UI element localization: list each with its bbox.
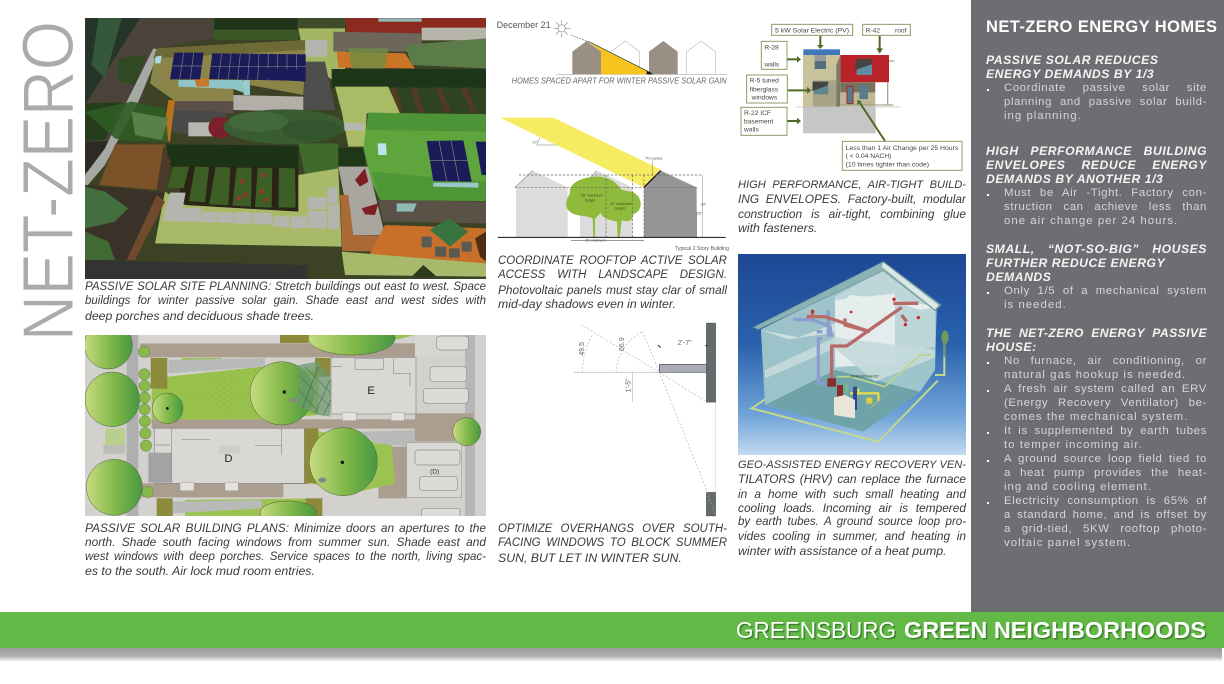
text block: passive solar — [986, 53, 1207, 122]
caption: optimize overhangs: SUN, BUT LET IN WINTER SUN. — [498, 551, 682, 565]
text block: small houses — [986, 242, 1207, 311]
caption: high performance envelopes: HIGH PERFORMANCE, AIR-TIGHT BUILD- — [738, 179, 966, 191]
chart: high performance envelope house section: ( < 0.04 NACH) — [846, 153, 891, 160]
caption: geo-assisted energy recovery: winter with assistance of a heat pump. — [738, 544, 946, 558]
caption: optimize overhangs: FACING WINDOWS TO BLOCK SUMMER — [498, 537, 727, 549]
heading: net-zero energy homes: NET-ZERO ENERGY HOMES — [986, 18, 1217, 36]
text block: high performance envelopes — [986, 144, 1207, 227]
caption: optimize overhangs — [498, 523, 727, 565]
chart: high performance envelope house section: windows — [751, 94, 778, 101]
chart: overhang section diagram: 66.9 — [619, 337, 626, 351]
trellis — [298, 362, 332, 417]
text block: high performance envelopes: ENVELOPES REDUCE ENERGY — [986, 158, 1207, 172]
panel: passive solar building plan: E — [367, 385, 375, 397]
caption: geo-assisted energy recovery: vides cooling in summer, and heating in — [738, 529, 966, 543]
lower left garden, dark lawn and roof — [85, 185, 165, 260]
chart: high performance envelope house section: R-5 tuned — [750, 78, 779, 85]
text block: small houses: FURTHER REDUCE ENERGY — [986, 256, 1165, 270]
ducts — [793, 303, 932, 410]
text block: net-zero energy passive house: a grid-tied, 5KW rooftop photo- — [1004, 523, 1207, 535]
panel: aerial view of passive solar site planning — [85, 18, 486, 279]
text block: net-zero energy passive house: HOUSE: — [986, 340, 1037, 354]
text block: net-zero energy passive house: a standard home, and is offset by — [1004, 509, 1207, 521]
chart: high performance envelope house section: R-22 ICF — [744, 110, 771, 117]
caption: rooftop solar access — [498, 255, 727, 311]
chart: winter solar spacing and rooftop solar access diagrams: December 21 — [497, 20, 551, 30]
panel: sidebar background — [971, 0, 1224, 612]
chart: winter solar spacing and rooftop solar access diagrams: height — [615, 206, 625, 210]
chart: winter solar spacing and rooftop solar access diagrams: 15' minimum — [585, 238, 606, 242]
text block: net-zero energy passive house: No furnace, air conditioning, or — [1004, 355, 1207, 367]
text block: net-zero energy passive house: ing and cooling element. — [1004, 481, 1152, 493]
text block: net-zero energy passive house: to temper incoming air. — [1004, 439, 1143, 451]
red house at top — [345, 18, 486, 38]
text block: passive solar: planning and passive solar build- — [1004, 96, 1207, 108]
caption: passive solar building plans — [85, 521, 486, 578]
caption: passive solar site planning: buildings for winter passive solar gain. Shade east and west sides with — [85, 295, 486, 307]
chart: high performance envelope house section: 5 kW Solar Electric (PV) — [775, 27, 849, 34]
text block: high performance envelopes: struction can achieve less than — [1004, 201, 1207, 213]
chart: high performance envelope house section: walls — [763, 61, 780, 68]
text block: net-zero energy passive house: It is supplemented by earth tubes — [1004, 425, 1207, 437]
text block: net-zero energy passive house: voltaic panel system. — [1004, 537, 1131, 549]
text block: net-zero energy passive house — [986, 326, 1207, 549]
chart: winter solar spacing and rooftop solar access diagrams: height — [585, 199, 595, 203]
text block: high performance envelopes: Must be Air -Tight. Factory con- — [1004, 187, 1207, 199]
caption: geo-assisted energy recovery: cooling loads. Incoming air is tempered — [738, 501, 966, 515]
caption: high performance envelopes: construction is air-tight, combining glue — [738, 207, 966, 221]
chart: overhang section diagram: 49.5 — [579, 342, 586, 356]
caption: high performance envelopes: with fasteners. — [738, 221, 817, 235]
chart: high performance envelope house section: Less than 1 Air Change per 25 Hours — [846, 145, 959, 152]
text block: passive solar: ing planning. — [1004, 110, 1082, 122]
footer shadow — [0, 648, 1222, 662]
roof — [753, 262, 941, 329]
lawn — [152, 367, 318, 419]
text block: net-zero energy passive house: A fresh air system called an ERV — [1004, 383, 1207, 395]
chart: winter solar spacing and rooftop solar access diagrams: 35' — [701, 202, 706, 207]
caption: optimize overhangs: OPTIMIZE OVERHANGS OVER SOUTH- — [498, 523, 727, 535]
hedge rows — [167, 144, 298, 168]
chart: overhang section diagram — [573, 322, 716, 516]
green roof house — [363, 113, 486, 201]
big shade tree — [223, 109, 347, 144]
caption: geo-assisted energy recovery — [738, 459, 966, 558]
pergola and garden beds — [99, 144, 165, 190]
chart: high performance envelope house section: (10 times tighter than code) — [846, 162, 929, 169]
house body — [761, 268, 937, 432]
text block: high performance envelopes: one air change per 24 hours. — [1004, 215, 1178, 227]
chart: overhang section diagram: 1'-5" — [626, 378, 633, 392]
text block: net-zero energy passive house: Electricity consumption is 65% of — [1004, 495, 1207, 507]
text block: net-zero energy passive house: a heat pump provides the heat- — [1004, 467, 1207, 479]
unit — [834, 395, 855, 418]
text block: small houses: is needed. — [1004, 299, 1067, 311]
house E — [331, 357, 416, 414]
garage and cars — [407, 443, 462, 498]
chart: winter solar spacing and rooftop solar access diagrams: 20° — [532, 140, 538, 144]
chart: winter solar spacing and rooftop solar access diagrams: 20' maximum — [610, 202, 632, 206]
footer band — [0, 612, 1224, 648]
text block: high performance envelopes: DEMANDS BY ANOTHER 1/3 — [986, 172, 1163, 186]
text block: net-zero energy passive house: (Energy Recovery Ventilator) be- — [1004, 397, 1207, 409]
caption: passive solar building plans: es to the south. Air lock mud room entries. — [85, 564, 315, 578]
text block: small houses: Only 1/5 of a mechanical system — [1004, 285, 1207, 297]
chart: winter solar spacing and rooftop solar access diagrams: 25' — [697, 210, 702, 215]
text block: net-zero energy passive house: comes the mechanical system. — [1004, 411, 1188, 423]
text block: passive solar: Coordinate passive solar site — [1004, 82, 1207, 94]
text block: net-zero energy passive house: natural gas hookup is needed. — [1004, 369, 1186, 381]
panel: geo-assisted energy recovery house cutaway — [738, 254, 966, 455]
text block: net-zero energy passive house: A ground source loop field tied to — [1004, 453, 1207, 465]
chart: high performance envelope house section: roof — [895, 27, 907, 34]
chart: high performance envelope house section: walls — [743, 127, 759, 134]
gravel beds — [140, 343, 415, 357]
note: typical 2 story building: Typical 2 Story Building — [675, 246, 729, 252]
caption: passive solar site planning: deep porches and deciduous shade trees. — [85, 309, 314, 323]
decks — [151, 358, 167, 389]
footer title: Greensburg Green Neighborhoods — [736, 617, 1208, 644]
caption: rooftop solar access: Photovoltaic panels must stay clar of small — [498, 283, 727, 297]
caption: passive solar building plans: north. Shade south facing windows from summer sun. Shade east and — [85, 535, 486, 549]
olive roof house — [150, 40, 305, 101]
footer title: Greensburg Green Neighborhoods: GREENSBURG — [736, 617, 896, 643]
chart: high performance envelope house section: basement — [744, 119, 773, 126]
chart: high performance envelope house section: R-42 — [866, 27, 880, 34]
panel: passive solar building plan: (D) — [430, 468, 439, 475]
caption: passive solar building plans: west windows with deep porches. Service spaces to the north, living spac- — [85, 551, 486, 563]
caption: passive solar site planning: PASSIVE SOLAR SITE PLANNING: Stretch buildings out east to west. Space — [85, 281, 486, 293]
text block: high performance envelopes: HIGH PERFORMANCE BUILDING — [986, 144, 1207, 158]
caption: geo-assisted energy recovery: GEO-ASSISTED ENERGY RECOVERY VEN- — [738, 459, 966, 471]
caption: geo-assisted energy recovery: in a home with such small heating and — [738, 487, 966, 501]
text block: small houses: SMALL, “NOT-SO-BIG” HOUSES — [986, 242, 1207, 256]
caption: passive solar building plans: PASSIVE SOLAR BUILDING PLANS: Minimize doors an apertures to the — [85, 521, 486, 535]
chart: overhang section diagram: 2'-7" — [678, 340, 692, 347]
panel: passive solar building plan — [85, 335, 486, 516]
chart: high performance envelope house section: R-28 — [764, 45, 779, 52]
caption: rooftop solar access: COORDINATE ROOFTOP ACTIVE SOLAR — [498, 255, 727, 267]
lawn and paving — [155, 168, 342, 247]
text block: small houses: DEMANDS — [986, 270, 1051, 284]
icons: sidebar bullets — [987, 89, 989, 504]
chart: winter solar spacing and rooftop solar access diagrams: PV panels — [646, 156, 663, 160]
caption: passive solar site planning — [85, 281, 486, 323]
caption: geo-assisted energy recovery: by earth tubes. A ground source loop pro- — [738, 516, 966, 528]
panel: passive solar building plan: D — [224, 453, 233, 465]
text block: passive solar: PASSIVE SOLAR REDUCES — [986, 53, 1158, 67]
chart: winter solar spacing and rooftop solar access diagrams — [497, 20, 727, 242]
caption: high performance envelopes — [738, 179, 966, 235]
trees — [84, 321, 481, 524]
chart: winter solar spacing and rooftop solar access diagrams: 35' maximum — [581, 194, 603, 198]
text block: net-zero energy passive house: THE NET-ZERO ENERGY PASSIVE — [986, 326, 1207, 340]
footer title: Greensburg Green Neighborhoods: GREENSBURG — [738, 618, 898, 644]
caption: high performance envelopes: ING ENVELOPES. Factory-built, modular — [738, 192, 966, 206]
footer title: Greensburg Green Neighborhoods: GREEN NEIGHBORHOODS — [904, 617, 1206, 643]
footer title: Greensburg Green Neighborhoods: GREEN NEIGHBORHOODS — [906, 618, 1208, 644]
caption: rooftop solar access: mid-day shadows even in winter. — [498, 297, 676, 311]
caption: geo-assisted energy recovery: TILATORS (HRV) can replace the furnace — [738, 472, 966, 486]
chart: high performance envelope house section — [740, 24, 962, 171]
chart: high performance envelope house section: fiberglass — [750, 86, 779, 93]
text block: passive solar: ENERGY DEMANDS BY 1/3 — [986, 67, 1154, 81]
ground loop — [752, 340, 944, 442]
house D — [154, 428, 304, 483]
panel: geo-assisted energy recovery house cutaway: INTAKE/EXHAUST — [850, 374, 879, 378]
caption: rooftop solar access: ACCESS WITH LANDSCAPE DESIGN. — [498, 269, 727, 281]
